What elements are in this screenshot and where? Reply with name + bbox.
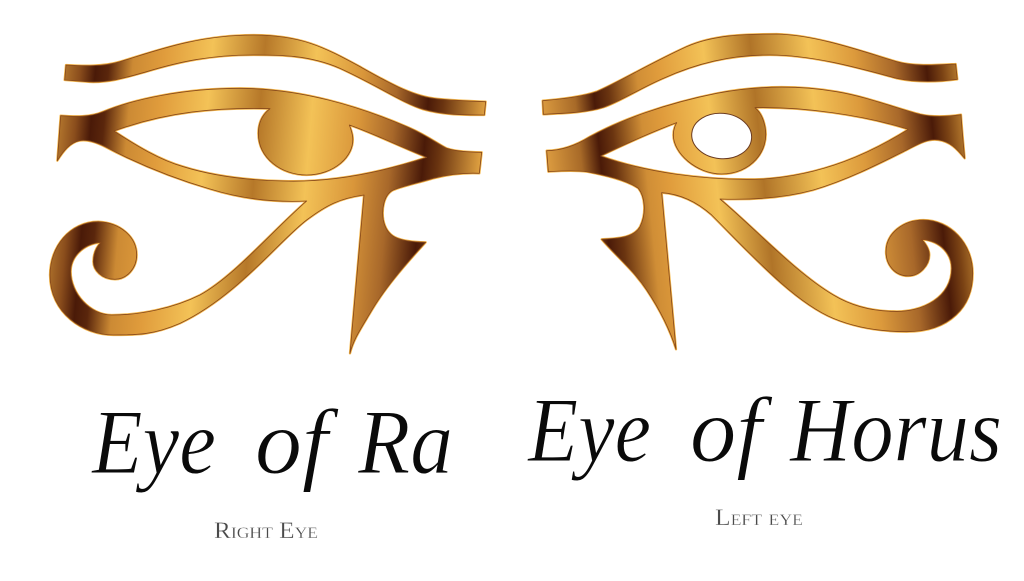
eyebrow bbox=[65, 35, 486, 115]
heading: Eye of Horus: of bbox=[690, 379, 774, 481]
heading: Eye of Horus: Eye bbox=[526, 379, 651, 481]
heading: Eye of Ra: Ra bbox=[357, 391, 453, 493]
eyebrow bbox=[543, 34, 957, 114]
iris opening bbox=[690, 111, 754, 161]
heading: Eye of Horus: Horus bbox=[789, 379, 1002, 481]
illustration: Eye of Ra (right eye) bbox=[50, 35, 486, 353]
caption: Right Eye: Right Eye bbox=[214, 518, 318, 543]
heading: Eye of Horus bbox=[526, 379, 1002, 481]
heading: Eye of Ra: Eye bbox=[90, 391, 216, 493]
heading: Eye of Ra: of bbox=[255, 391, 340, 493]
caption: Left eye: Left eye bbox=[715, 505, 803, 530]
eye outline with pupil, spiral and teardrop bbox=[50, 88, 482, 353]
eye outline with iris ring, spiral and teardrop bbox=[547, 87, 973, 349]
illustration: Eye of Horus (left eye) bbox=[543, 34, 973, 349]
heading: Eye of Ra bbox=[90, 391, 453, 493]
